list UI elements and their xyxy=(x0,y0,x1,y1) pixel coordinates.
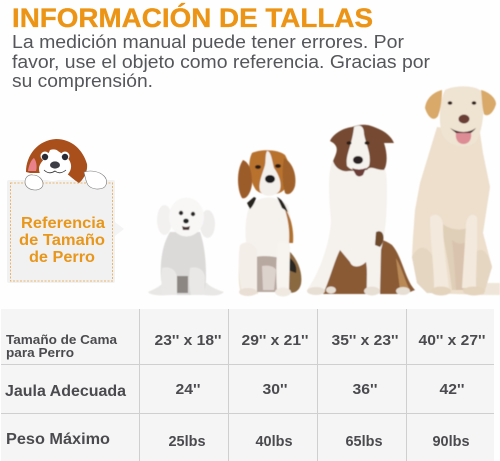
row: maximum weight: 40lbs xyxy=(256,433,292,450)
row: bed size: para Perro xyxy=(6,346,74,360)
illustration: labrador xyxy=(412,86,500,296)
row: bed size xyxy=(6,332,486,360)
row: suitable crate: 30'' xyxy=(262,381,288,398)
row: suitable crate: 24'' xyxy=(176,381,200,398)
row: maximum weight xyxy=(6,431,470,450)
intro text: su comprensión. xyxy=(12,70,153,91)
panel: dog size reference card xyxy=(7,180,124,283)
row: bed size: 35'' x 23'' xyxy=(332,332,398,349)
row: suitable crate: 36'' xyxy=(352,381,378,398)
title: INFORMACIÓN DE TALLAS xyxy=(12,2,373,33)
row: maximum weight: 65lbs xyxy=(346,433,382,450)
row: maximum weight: 90lbs xyxy=(432,433,470,450)
card label: de Tamaño xyxy=(19,232,105,249)
icon: cartoon dog xyxy=(25,139,107,190)
intro text: favor, use el objeto como referencia. Gracias por xyxy=(12,51,430,72)
intro text: La medición manual puede tener errores. Por xyxy=(12,31,404,52)
row: maximum weight: 25lbs xyxy=(168,433,206,450)
intro text xyxy=(12,31,430,91)
row: suitable crate xyxy=(5,381,464,400)
illustration: border collie xyxy=(307,125,415,296)
card label: de Perro xyxy=(29,249,95,266)
card label: Referencia xyxy=(21,215,105,232)
row: bed size: 23'' x 18'' xyxy=(154,332,222,349)
row: suitable crate: Jaula Adecuada xyxy=(5,383,126,400)
illustration: poodle xyxy=(148,198,224,296)
card label xyxy=(19,215,105,266)
row: maximum weight: Peso Máximo xyxy=(6,431,110,448)
row: bed size: Tamaño de Cama xyxy=(6,333,118,347)
row: suitable crate: 42'' xyxy=(440,381,464,398)
panel: size table xyxy=(1,309,494,461)
illustration: beagle xyxy=(238,150,301,296)
row: bed size: 29'' x 21'' xyxy=(242,332,308,349)
row: bed size: 40'' x 27'' xyxy=(418,332,486,349)
